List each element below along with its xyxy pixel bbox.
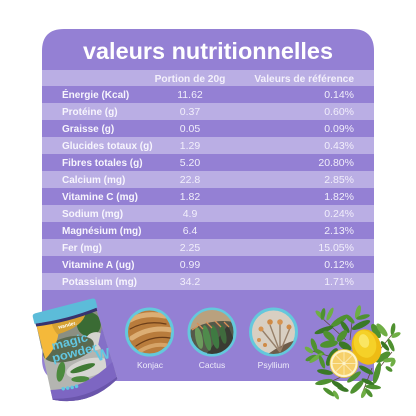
label: Psyllium: Psyllium	[258, 360, 289, 370]
row: vitamine A: 0.12%	[324, 259, 354, 271]
whole lemon	[347, 325, 386, 369]
row: magnesium	[42, 222, 374, 239]
row: potassium	[42, 273, 374, 290]
icon: cactus ingredient	[189, 309, 235, 356]
row: vitamine C	[42, 188, 374, 205]
row: potassium: Potassium (mg)	[62, 277, 137, 288]
row: fer: 15.05%	[318, 242, 354, 254]
table: nutrition values	[42, 70, 374, 290]
row: sodium: Sodium (mg)	[62, 209, 123, 220]
row: calcium: 2.85%	[324, 174, 354, 186]
row: fibres	[42, 154, 374, 171]
leaves	[304, 305, 401, 400]
row: proteine: Protéine (g)	[62, 107, 118, 118]
row: potassium: 1.71%	[324, 276, 354, 288]
lemon slice	[330, 350, 358, 378]
row: vitamine A	[42, 256, 374, 273]
row: sodium: 4.9	[183, 208, 197, 220]
title: valeurs nutritionnelles	[83, 38, 333, 64]
row: magnesium: 6.4	[183, 225, 197, 237]
row: calcium	[42, 171, 374, 188]
row: glucides: 0.43%	[324, 140, 354, 152]
row: energie: 0.14%	[324, 89, 354, 101]
table header	[42, 70, 374, 86]
table header: Valeurs de référence	[254, 74, 354, 85]
row: vitamine C: 1.82	[180, 191, 200, 203]
row: calcium: Calcium (mg)	[62, 175, 125, 186]
jar lid	[32, 298, 99, 329]
row: graisse	[42, 120, 374, 137]
row: sodium	[42, 205, 374, 222]
jar: magic powder product	[32, 298, 118, 402]
jar body	[36, 311, 118, 402]
row: glucides: 1.29	[180, 140, 200, 152]
row: graisse: 0.05	[180, 123, 200, 135]
row: graisse: Graisse (g)	[62, 124, 114, 135]
row: calcium: 22.8	[180, 174, 200, 186]
row: magnesium: 2.13%	[324, 225, 354, 237]
jar body: powder	[51, 340, 99, 365]
row: energie	[42, 86, 374, 103]
row: vitamine C: 1.82%	[324, 191, 354, 203]
icon: psyllium ingredient	[250, 309, 296, 356]
row: energie: Énergie (Kcal)	[62, 88, 129, 101]
row: proteine	[42, 103, 374, 120]
row: proteine: 0.60%	[324, 106, 354, 118]
row: vitamine C: Vitamine C (mg)	[62, 192, 138, 203]
row: graisse: 0.09%	[324, 123, 354, 135]
jar body: W	[94, 345, 113, 365]
lemon and leaves	[304, 305, 401, 400]
row: magnesium: Magnésium (mg)	[62, 226, 141, 237]
row: vitamine A: Vitamine A (ug)	[62, 260, 134, 271]
row: fer: Fer (mg)	[62, 243, 102, 254]
row: energie: 11.62	[177, 89, 203, 101]
row: fibres: 20.80%	[318, 157, 354, 169]
row: glucides: Glucides totaux (g)	[62, 141, 153, 152]
row: proteine: 0.37	[180, 106, 200, 118]
jar body: magic	[50, 330, 90, 353]
table header: Portion de 20g	[155, 74, 225, 85]
row: potassium: 34.2	[180, 276, 200, 288]
row: fibres: 5.20	[180, 157, 200, 169]
label: Cactus: Cactus	[199, 360, 225, 370]
icon: konjac ingredient	[126, 309, 172, 355]
row: fibres: Fibres totales (g)	[62, 158, 143, 169]
jar body: wander.	[57, 320, 78, 331]
row: glucides	[42, 137, 374, 154]
row: sodium: 0.24%	[324, 208, 354, 220]
row: fer: 2.25	[180, 242, 200, 254]
row: vitamine A: 0.99	[180, 259, 200, 271]
label: Konjac: Konjac	[137, 360, 164, 370]
panel: nutrition background	[42, 29, 374, 381]
row: fer	[42, 239, 374, 256]
